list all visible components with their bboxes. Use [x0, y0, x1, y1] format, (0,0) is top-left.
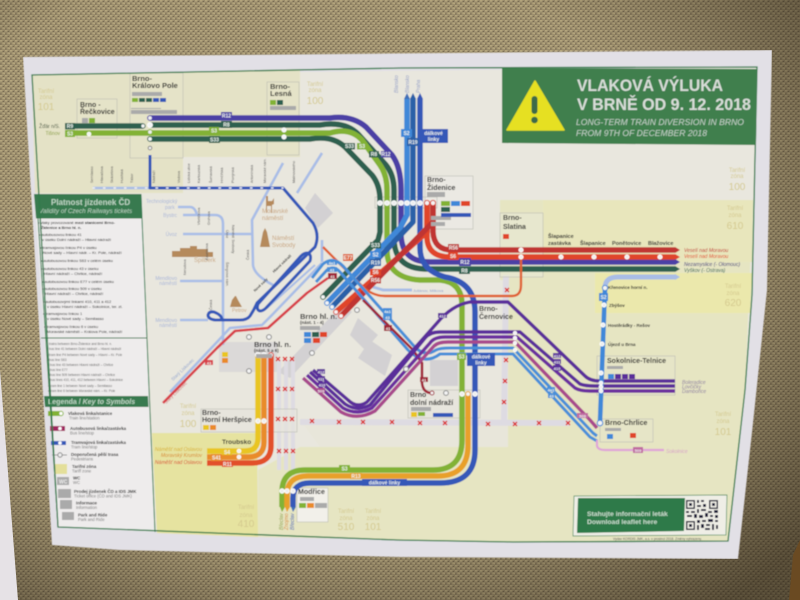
- station names: Ponětovice: [612, 241, 641, 247]
- ticket validity list: • autobusovou linkou S63 v celém úseku: [41, 258, 113, 263]
- station names: Troubsko: [222, 439, 251, 446]
- landmark labels: Svobody: [272, 243, 295, 249]
- tariff zone labels: 100: [729, 182, 746, 193]
- line labels: 43: [330, 268, 335, 272]
- tariff zone labels: 610: [727, 221, 744, 232]
- legend: WC: WC: [73, 480, 80, 485]
- line labels: dálkové: [424, 131, 443, 137]
- legend: information: Informace: [76, 500, 98, 506]
- rotated stop names on tram line: Hlavačova: [100, 166, 104, 183]
- station names: Řečkovice: [80, 107, 115, 116]
- ticket validity list: v úseku Hlavní nádraží – Sokolnice, ter. zt.: [47, 304, 123, 309]
- landmark labels: Moravské: [262, 209, 289, 215]
- line labels: S33: [210, 138, 219, 144]
- tariff zone labels: Tarifní: [307, 82, 324, 88]
- tariff zone labels: Tarifní: [338, 509, 354, 515]
- bus lines blue 4a1 and 43: [312, 260, 597, 441]
- landmark labels: Bystrc: [163, 213, 177, 219]
- station names: Horní Heršpice: [202, 417, 252, 424]
- line labels: R11: [223, 462, 232, 468]
- grey buildings and station halls: [219, 193, 458, 386]
- tariff zone labels: Tarifní: [238, 505, 254, 511]
- title banner: V BRNĚ OD 9. 12. 2018: [577, 95, 751, 114]
- rotated stop names on tram line: Nádraží: [152, 170, 156, 183]
- tariff zone labels: zóna: [39, 95, 53, 101]
- S2 line to Křenovice: [605, 277, 675, 288]
- destination labels: Blansko: [405, 75, 411, 93]
- ticket validity list: • autobusovými linkami 410, 411 a 412: [43, 299, 112, 304]
- tariff zone labels: 620: [725, 298, 742, 309]
- QR code: [686, 500, 718, 530]
- landmark labels: Mendlovo: [155, 318, 177, 324]
- station names: Sokolnice-Telnice: [607, 358, 666, 365]
- ticket validity list: Nové sady – Hlavní nádr. – Kr. Pole, nádraží: [43, 250, 123, 255]
- tariff zone labels: zóna: [239, 513, 253, 519]
- rotated stop names on tram line: Kartouzská: [197, 165, 201, 183]
- destination labels: Dambořice: [682, 389, 706, 395]
- line labels: 509: [579, 414, 587, 418]
- tariff zone labels: 101: [38, 102, 55, 113]
- rotated stop names on tram line: Semilasso: [90, 166, 94, 183]
- tariff zone labels: zóna: [730, 174, 744, 180]
- line labels: R12: [381, 152, 391, 158]
- station names: Brno-: [479, 306, 498, 313]
- landmark labels: park: [165, 205, 175, 211]
- legend: information: [60, 500, 98, 510]
- tariff zone labels: Tarifní: [180, 404, 196, 410]
- station names: (nást. 1 - 4): [300, 320, 324, 325]
- destination labels: Moravský Krumlov: [161, 453, 202, 459]
- legend: walking route: Doporučená pěší trasa: [71, 452, 119, 457]
- station names: Brno-: [427, 177, 446, 184]
- destination labels: Břeclav: [290, 513, 296, 530]
- line labels: 43: [549, 394, 554, 398]
- line labels: 410: [319, 382, 326, 388]
- panel heading: Platnost jízdenek ČD: [51, 198, 130, 207]
- line labels: R9: [67, 124, 73, 130]
- legend: train line: Train line/station: [69, 416, 100, 420]
- ticket validity English list: • tram line 6 between Moravské nám. – Kr. Pole: [48, 389, 115, 393]
- download box with QR code: [573, 495, 727, 536]
- destination labels: Veselí nad Moravou: [684, 254, 729, 260]
- ticket validity English list: • bus lines 410, 411, 412 between Hlavní – Sokolnice: [48, 378, 123, 382]
- destination labels: Praha: [416, 79, 422, 93]
- destination labels: Břeclav: [279, 513, 285, 530]
- landmark labels: Technologický: [146, 199, 178, 205]
- rotated stop names on tram line: Všetičkova: [197, 208, 201, 225]
- legend: bus line: Autobusová linka/zastávka: [70, 426, 127, 431]
- destination labels: Žďár n/S.: [39, 122, 60, 130]
- legend heading: Legenda / Key to Symbols: [48, 399, 135, 406]
- line labels: S41: [212, 456, 221, 462]
- line labels: 412: [554, 354, 561, 358]
- legend: information: Information: [76, 505, 98, 510]
- rotated stop names on tram line: Skácelova: [110, 166, 114, 183]
- station names: Lesná: [270, 89, 293, 98]
- line labels: 43: [207, 360, 212, 366]
- tariff zone labels: zóna: [728, 213, 742, 219]
- rotated stop names on tram line: Nové sady: [253, 277, 269, 293]
- station boxes: [77, 73, 675, 522]
- line labels: 509: [318, 388, 325, 394]
- footer note: Vydav KORDIS JMK, a.s. v prosinci 2018. Změny vyhrazeny.: [613, 537, 702, 541]
- legend: tariff zone: Tarifní zóna: [72, 464, 97, 469]
- stops on rail tram line: [93, 187, 283, 189]
- line labels: R12: [460, 260, 470, 266]
- rotated stop names on tram line: Hrnčířská: [220, 168, 224, 183]
- rotated stop names on tram line: Pionýrská: [231, 167, 235, 183]
- paper sheet: [23, 50, 772, 559]
- line labels: R13: [351, 474, 361, 480]
- landmark labels: Starý Lískovec: [163, 380, 188, 405]
- legend: ticket office: Ticket office (ČD and IDS JMK): [74, 494, 133, 498]
- ticket validity English list: • bus line S63: [47, 358, 67, 362]
- station names: (nást. 5 a 6): [254, 348, 279, 353]
- station names: Brno-Chrlice: [605, 420, 648, 427]
- line labels: 4a1: [384, 309, 392, 314]
- line labels: S33: [345, 144, 354, 150]
- line labels: R12: [222, 114, 231, 120]
- landmark labels: Špilberk: [194, 257, 217, 264]
- legend: bus line: Bus line/stop: [70, 430, 95, 436]
- legend: train line: Vlaková linka/stanice: [68, 411, 113, 416]
- line labels: 43: [385, 315, 390, 320]
- station names: Královo Pole: [132, 81, 178, 90]
- ticket validity English list: [47, 341, 123, 393]
- station names: Šlapanice: [580, 239, 606, 247]
- rotated stop names on tram line: Antonínská: [250, 165, 254, 183]
- title banner: [502, 68, 757, 145]
- closed line strips: [277, 275, 570, 470]
- legend: tram line: [51, 440, 126, 450]
- tariff zone labels: zóna: [308, 88, 322, 94]
- landmark labels: [146, 199, 444, 405]
- legend: walking route: Pedestrians: [71, 456, 93, 462]
- ticket validity English list: • bus line 41 between Dolní nádraží – Hlavní nádraží: [47, 347, 121, 351]
- station names: Brno -: [80, 102, 101, 109]
- ticket validity list: • autobusovou linkou E77 v celém úseku: [42, 279, 114, 284]
- ticket validity English list: • tram line 1 between Nové sady – Semilasso: [48, 384, 112, 388]
- station names: Židenice: [427, 183, 456, 192]
- rotated stop names on tram line: Nerudova: [183, 259, 187, 275]
- station names: Brno-: [202, 410, 221, 417]
- landmark labels: náměstí: [159, 281, 178, 287]
- legend: bus line: [50, 426, 127, 436]
- legend: tram line: Tram line/stop: [71, 444, 98, 450]
- ticket validity list: • tramvajovou linkou 1: [43, 311, 83, 316]
- station names: Brno-: [270, 82, 290, 91]
- landmark labels: Juliánov, Mílkova: [413, 288, 444, 293]
- line labels: S2: [600, 295, 607, 301]
- ticket validity list: v úseku Dolní nádraží – Hlavní nádraží: [42, 237, 112, 242]
- ticket validity list: [38, 220, 123, 334]
- service tiles in station boxes: [82, 92, 636, 508]
- tariff zone labels: Tarifní: [727, 206, 744, 212]
- tariff zone labels: 410: [238, 519, 255, 530]
- line labels: linky: [475, 360, 487, 366]
- ticket validity list: Hlavní nádraží – Chrlice, nádraží: [44, 271, 103, 276]
- legend: walking route: [52, 452, 119, 462]
- destination labels: Sokolnice: [666, 449, 688, 455]
- line labels: 412: [439, 314, 447, 318]
- legend: ticket office: [58, 489, 137, 498]
- download box with QR code: Download leaflet here: [587, 519, 657, 526]
- city tram and bus network: light blue lines: [93, 153, 412, 392]
- tariff zone labels: Tarifní: [715, 412, 732, 418]
- station names: Slatina: [503, 224, 526, 231]
- station names: Újezd u Brna: [608, 341, 636, 347]
- map frame: [32, 67, 757, 542]
- download box with QR code: Stahujte informační leták: [587, 511, 668, 518]
- rotated stop names on tram line: Malinovského: [292, 161, 296, 183]
- destination labels: [39, 75, 740, 531]
- station names: zastávka: [548, 241, 572, 247]
- rotated stop names on tram line: Náměstí Svobody: [231, 225, 235, 254]
- destination labels: Veselí nad Moravou: [684, 248, 729, 254]
- legend: WC: WC: [73, 476, 81, 480]
- ticket validity list: Židenice a Brno hl. n.: [41, 225, 81, 230]
- title banner: FROM 9TH OF DECEMBER 2018: [576, 128, 707, 138]
- tariff zone labels: [38, 82, 746, 533]
- rotated stop names on tram line: Lidická ulice: [187, 163, 191, 183]
- panel: ticket validity and legend: [34, 194, 155, 532]
- legend: WC: [57, 476, 81, 486]
- line labels: 41: [330, 274, 335, 279]
- line labels: S6: [372, 270, 379, 276]
- destination labels: Tišnov: [45, 131, 60, 137]
- icon: warning triangle: [507, 81, 564, 130]
- legend: tariff zone: [54, 464, 97, 474]
- line labels: S3: [341, 466, 348, 472]
- line labels: 509: [635, 448, 642, 453]
- ticket validity list: Moravské náměstí – Králova Pole, nádraží: [47, 329, 123, 334]
- train lines S3 R8 R12 S33 top: [67, 99, 675, 507]
- legend: ticket office: Prodej jízdenek ČD a IDS JMK: [74, 489, 137, 494]
- destination labels: Náměšť nad Oslavou: [155, 447, 202, 453]
- tariff zone labels: 101: [365, 522, 382, 533]
- station names: Šlapanice: [548, 232, 574, 240]
- ticket validity list: • autobusovou linkou 41: [39, 232, 82, 237]
- line labels: R19: [371, 260, 380, 266]
- line labels: [65, 112, 643, 486]
- yellow orange red lines to south west: [207, 355, 271, 463]
- destination labels: Znojmo: [284, 513, 290, 531]
- tariff zone labels: zóna: [339, 516, 353, 522]
- rotated stop names on tram line: Česká: [208, 300, 213, 310]
- destination labels: Lovčičky: [682, 384, 702, 390]
- legend: park and ride: Park and Ride: [78, 517, 105, 522]
- panel heading: Validity of Czech Railways tickets: [39, 208, 133, 215]
- tram line dark blue with loops: [150, 155, 317, 320]
- line labels: dálkové linky: [369, 480, 400, 486]
- legend: park and ride: Park and Ride: [78, 512, 108, 518]
- tariff zone labels: 100: [307, 96, 324, 107]
- line labels: 4a1: [329, 260, 336, 266]
- rotated stop names on tram line: Šumavská: [208, 166, 213, 183]
- ticket validity list: • vlaky provozované mezi stanicemi Brno-: [38, 220, 116, 225]
- ticket validity English list: • tram line P4 between Nové sady – Hlavní – Kr. Pole: [47, 353, 122, 357]
- banner subheading: LONG-TERM TRAIN DIVERSION IN BRNO: [576, 117, 744, 127]
- landmark labels: Petrov: [232, 308, 247, 314]
- orange E77 bus line: [323, 247, 521, 296]
- rotated stop names on tram line: Moravské nám.: [263, 158, 267, 183]
- station names: Křenovice horní n.: [608, 285, 648, 290]
- line labels: 411: [554, 360, 561, 364]
- station names: Brno hl. n.: [300, 312, 337, 321]
- line labels: 411: [318, 376, 325, 382]
- panel heading: [39, 198, 133, 215]
- tariff zone labels: 101: [715, 427, 732, 438]
- tariff zone labels: 100: [180, 419, 197, 430]
- tariff zone labels: 510: [338, 522, 355, 533]
- tariff zones: [32, 69, 300, 193]
- line labels: S3: [359, 144, 365, 150]
- line labels: R8: [223, 122, 230, 128]
- rotated stop names on tram line: [90, 158, 296, 310]
- ticket validity list: • autobusovou linkou 43 v úseku: [41, 266, 98, 271]
- line labels: S3: [458, 354, 465, 360]
- destination labels: Vyškov (- Ostrava): [684, 268, 726, 274]
- tariff zone labels: Tarifní: [729, 168, 746, 174]
- tariff zone labels: zóna: [181, 411, 195, 417]
- line labels: R8: [461, 268, 468, 274]
- bus line 41 red: [163, 278, 328, 403]
- ticket validity English list: • bus line 43 between Hlavní nádraží – Chrlice: [48, 363, 113, 367]
- legend: tram line: Tramvajová linka/zastávka: [71, 440, 126, 445]
- tariff zone labels: zóna: [716, 419, 730, 425]
- rotated stop names on tram line: Šilingrovo nám.: [225, 262, 230, 287]
- tariff zone labels: zóna: [726, 291, 740, 297]
- legend: train line: [48, 411, 113, 420]
- line labels: S6: [450, 254, 456, 260]
- ticket validity list: Hlavní nádraží – Chrlice, nádraží: [45, 291, 104, 296]
- landmark labels: Mendlovo: [155, 276, 177, 282]
- station names: Brno-: [503, 215, 522, 222]
- legend: park and ride: [62, 512, 108, 522]
- line labels: 4a1: [548, 388, 555, 392]
- destination labels: Boleradice: [682, 380, 706, 386]
- station names: Černovice: [479, 312, 513, 321]
- line arrows: [280, 93, 680, 512]
- tariff zone labels: Tarifní: [38, 89, 54, 95]
- ticket validity English list: • bus line 509 between Hlavní nádraží – Chrlice: [48, 373, 115, 377]
- line labels: R19: [408, 140, 418, 146]
- line labels: S3: [67, 132, 73, 138]
- icon: landmarks: [172, 196, 274, 307]
- legend: tariff zone: Tariff zone: [72, 468, 92, 474]
- station names: Zbýšov: [609, 303, 625, 308]
- rotated stop names on tram line: Grohova: [207, 211, 211, 225]
- rotated stop names on tram line: Hlavní nádraží: [272, 253, 293, 274]
- station names: [80, 74, 673, 496]
- line labels: 41: [422, 378, 427, 382]
- station names: Hostěrádky - Rešov: [608, 323, 651, 328]
- ticket validity list: • autobusovou linkou 509 v úseku: [42, 286, 102, 291]
- rotated stop names on tram line: Česká: [245, 250, 250, 260]
- line labels: S2: [403, 131, 410, 137]
- line labels: S4: [224, 450, 230, 456]
- line labels: S33: [371, 243, 380, 249]
- rotated stop names on tram line: Husitská: [120, 169, 124, 183]
- line labels: S2: [372, 252, 379, 258]
- line labels: linky: [428, 137, 439, 143]
- legend: WC: WC: [59, 480, 68, 486]
- landmark labels: Starý Lískovec: [170, 357, 195, 382]
- station names: Brno-: [132, 74, 152, 83]
- line labels: 412: [318, 370, 325, 374]
- ticket validity list: v úseku Nové sady – Semilasso: [47, 316, 104, 321]
- destination labels: Nezamyslice (- Olomouc): [684, 262, 740, 268]
- station names: Brno hl. n.: [254, 340, 291, 349]
- station names: dolní nádraží: [410, 400, 454, 407]
- ticket validity English list: • trains between Brno-Židenice and Brno hl. n.: [47, 341, 112, 346]
- rotated stop names on tram line: Vodova: [177, 171, 181, 183]
- neighbouring sheet at left edge: [0, 370, 18, 600]
- line labels: R56: [371, 278, 380, 284]
- landmark labels: Úvoz: [166, 231, 177, 238]
- tariff zone labels: zóna: [366, 516, 380, 522]
- line labels: S3: [211, 128, 217, 134]
- station names: Blažovice: [648, 241, 673, 247]
- destination labels: Blansko: [394, 75, 400, 93]
- line labels: 410: [554, 366, 561, 371]
- line labels: R8: [371, 152, 377, 158]
- rotated stop names on tram line: Kounicova: [205, 243, 209, 260]
- ticket validity English list: • bus line E77: [48, 368, 68, 372]
- banner heading: VLAKOVÁ VÝLUKA: [577, 76, 723, 95]
- line labels: 41: [386, 326, 391, 331]
- ticket validity list: • tramvajovou linkou 6 v úseku: [44, 324, 98, 329]
- rotated stop names on tram line: Tábor: [130, 173, 134, 183]
- station names: Brno: [410, 392, 426, 399]
- line labels: R56: [449, 246, 458, 252]
- station names: Modřice: [298, 489, 325, 496]
- landmark labels: Náměstí: [272, 236, 295, 242]
- line labels: dálkové: [472, 354, 491, 360]
- red crosses closed sections: [276, 288, 570, 453]
- landmark labels: náměstí: [262, 216, 284, 222]
- stations white dots: [87, 116, 662, 493]
- map area: [32, 67, 757, 542]
- destination labels: Náměšť nad Oslavou: [155, 460, 202, 466]
- landmark labels: náměstí: [159, 323, 178, 329]
- rotated stop names on tram line: Úvoz: [225, 230, 230, 238]
- tariff zone labels: Tarifní: [365, 509, 382, 515]
- line labels: E77: [344, 256, 353, 262]
- ticket validity list: • tramvajovou linkou P4 v úseku: [40, 245, 97, 250]
- bus lines purple diamond: [303, 302, 675, 450]
- tariff zone labels: Tarifní: [725, 284, 742, 290]
